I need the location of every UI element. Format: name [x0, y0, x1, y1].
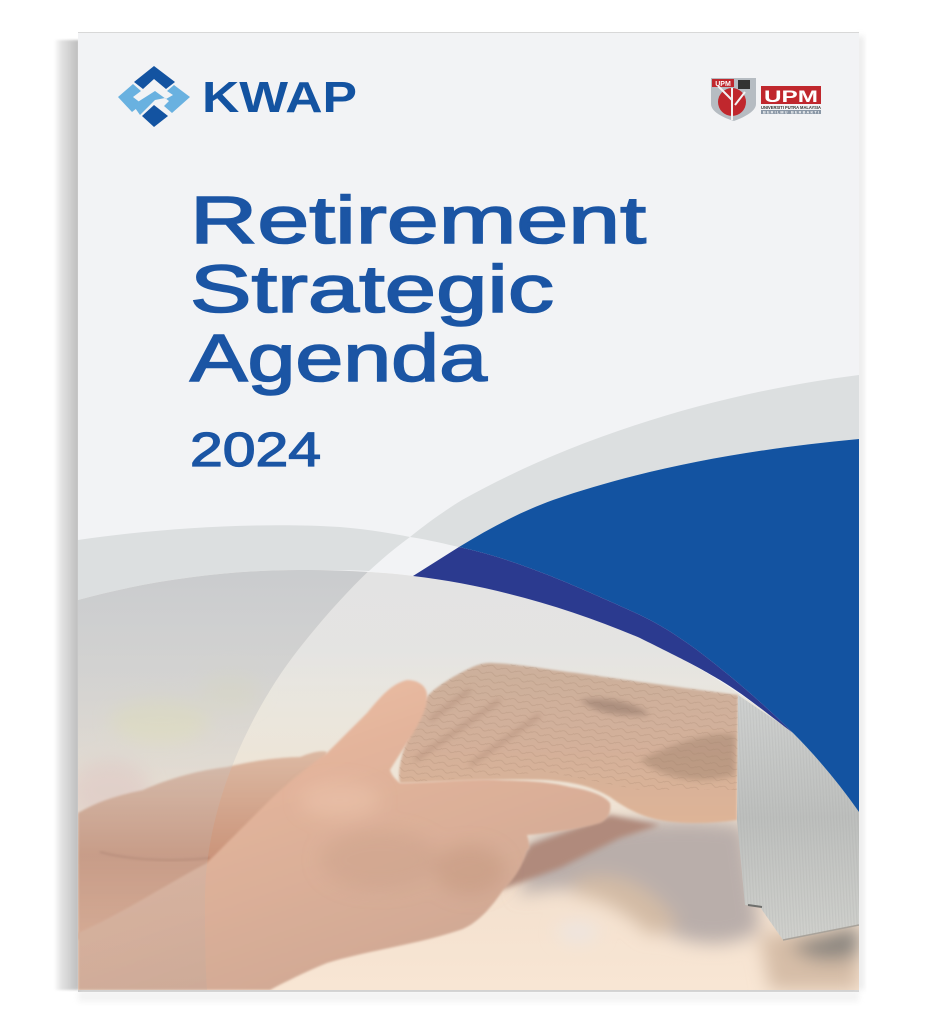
left back hand: [78, 751, 327, 940]
overlay inside big arc: [300, 572, 660, 650]
title: Retirement: [190, 183, 647, 258]
blurred clothing backdrop: [520, 820, 859, 990]
hand skin wrinkles: [399, 663, 738, 790]
navy swoosh: [413, 547, 793, 733]
photo backdrop: [78, 619, 859, 990]
UPM logo: [711, 78, 822, 121]
shirt cuff: [737, 695, 859, 940]
cover background: [78, 33, 859, 708]
title: [190, 183, 647, 396]
overlay outside big arc: [78, 570, 368, 990]
UPM logo: UPM: [764, 87, 818, 106]
grey arc band left: [78, 525, 410, 600]
grey arc band right: [410, 375, 859, 547]
soft yellow speckles: [78, 705, 202, 806]
report cover: [70, 33, 859, 990]
UPM red wordmark: [761, 86, 821, 104]
young hand: [78, 680, 610, 990]
under fingers of old hand: [500, 815, 660, 890]
KWAP wordmark: KWAP: [202, 73, 357, 122]
age spots and shading: [415, 690, 735, 780]
KWAP logo: [118, 66, 357, 127]
KWAP diamond mark: [118, 66, 190, 127]
UPM shield: UPM: [715, 81, 731, 88]
year: 2024: [190, 424, 321, 477]
photo: caring hands: [78, 570, 859, 990]
back hand palm crease: [100, 852, 210, 860]
title: Agenda: [190, 321, 488, 396]
title: Strategic: [190, 252, 554, 327]
blue swoosh: [459, 439, 859, 812]
university name: UNIVERSITI PUTRA MALAYSIA: [761, 105, 822, 110]
young hand soft shading: [316, 790, 499, 890]
UPM tagline: BERILMU BERBAKTI: [763, 111, 819, 115]
elderly hand: [399, 663, 738, 823]
